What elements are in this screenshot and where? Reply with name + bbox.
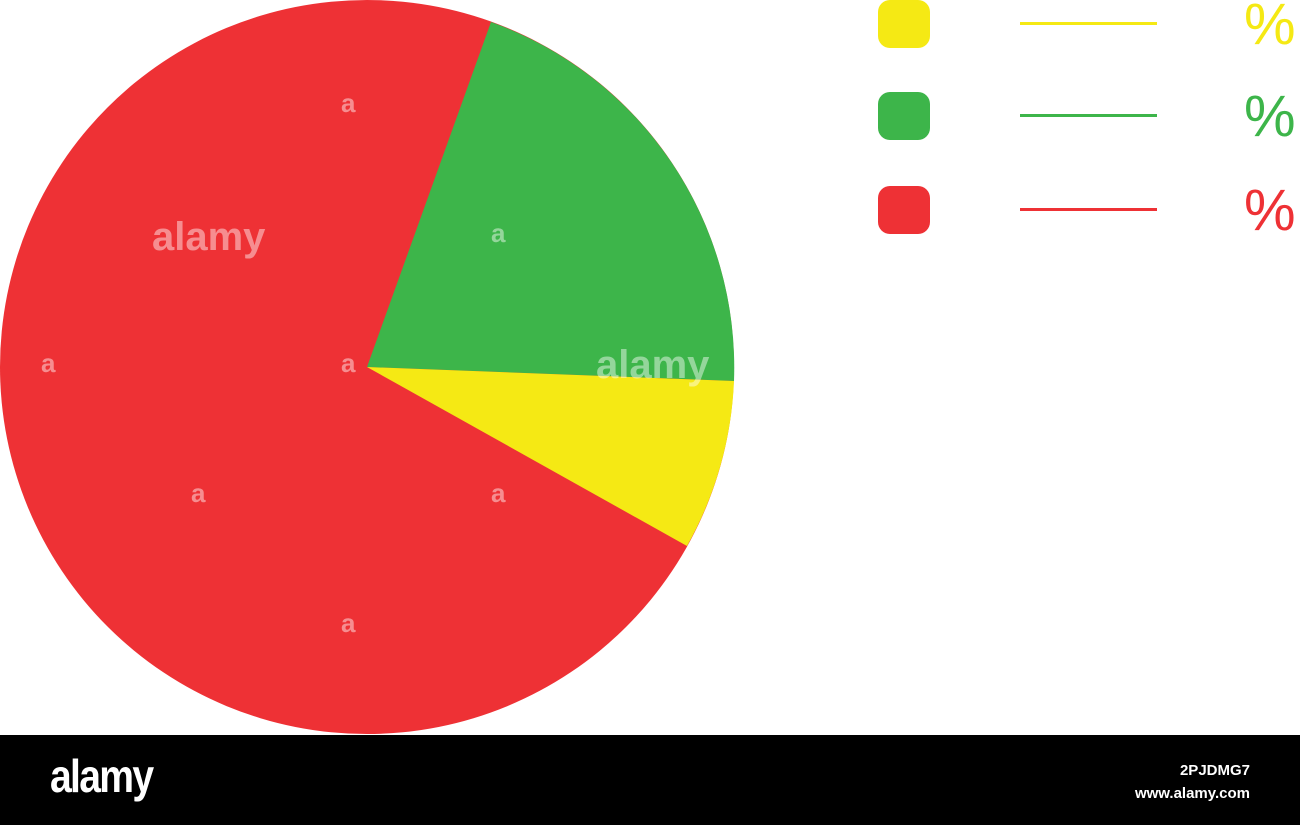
watermark text: alamy: [596, 343, 710, 387]
footer id text: www.alamy.com: [1135, 785, 1250, 802]
watermark text: a: [191, 478, 206, 508]
footer id text: [1135, 762, 1250, 802]
legend item: green: [878, 84, 1296, 149]
slice: red: [0, 0, 734, 734]
footer logo: alamy: [50, 750, 152, 802]
watermark text: a: [341, 88, 356, 118]
slice: yellow: [367, 367, 734, 546]
pie chart: [0, 0, 734, 734]
watermark text: a: [341, 348, 356, 378]
watermark text: a: [491, 218, 506, 248]
watermark text: [41, 88, 710, 638]
watermark text: a: [41, 348, 56, 378]
watermark text: a: [491, 478, 506, 508]
legend item: green: %: [1244, 84, 1296, 149]
footer id text: 2PJDMG7: [1180, 762, 1250, 779]
slice: green: [367, 22, 734, 381]
legend item: red: [878, 178, 1296, 243]
watermark text: a: [341, 608, 356, 638]
legend item: yellow: [878, 0, 1296, 57]
legend: [878, 0, 1296, 243]
footer bar: [0, 735, 1300, 825]
legend item: red: %: [1244, 178, 1296, 243]
watermark text: alamy: [152, 215, 266, 259]
